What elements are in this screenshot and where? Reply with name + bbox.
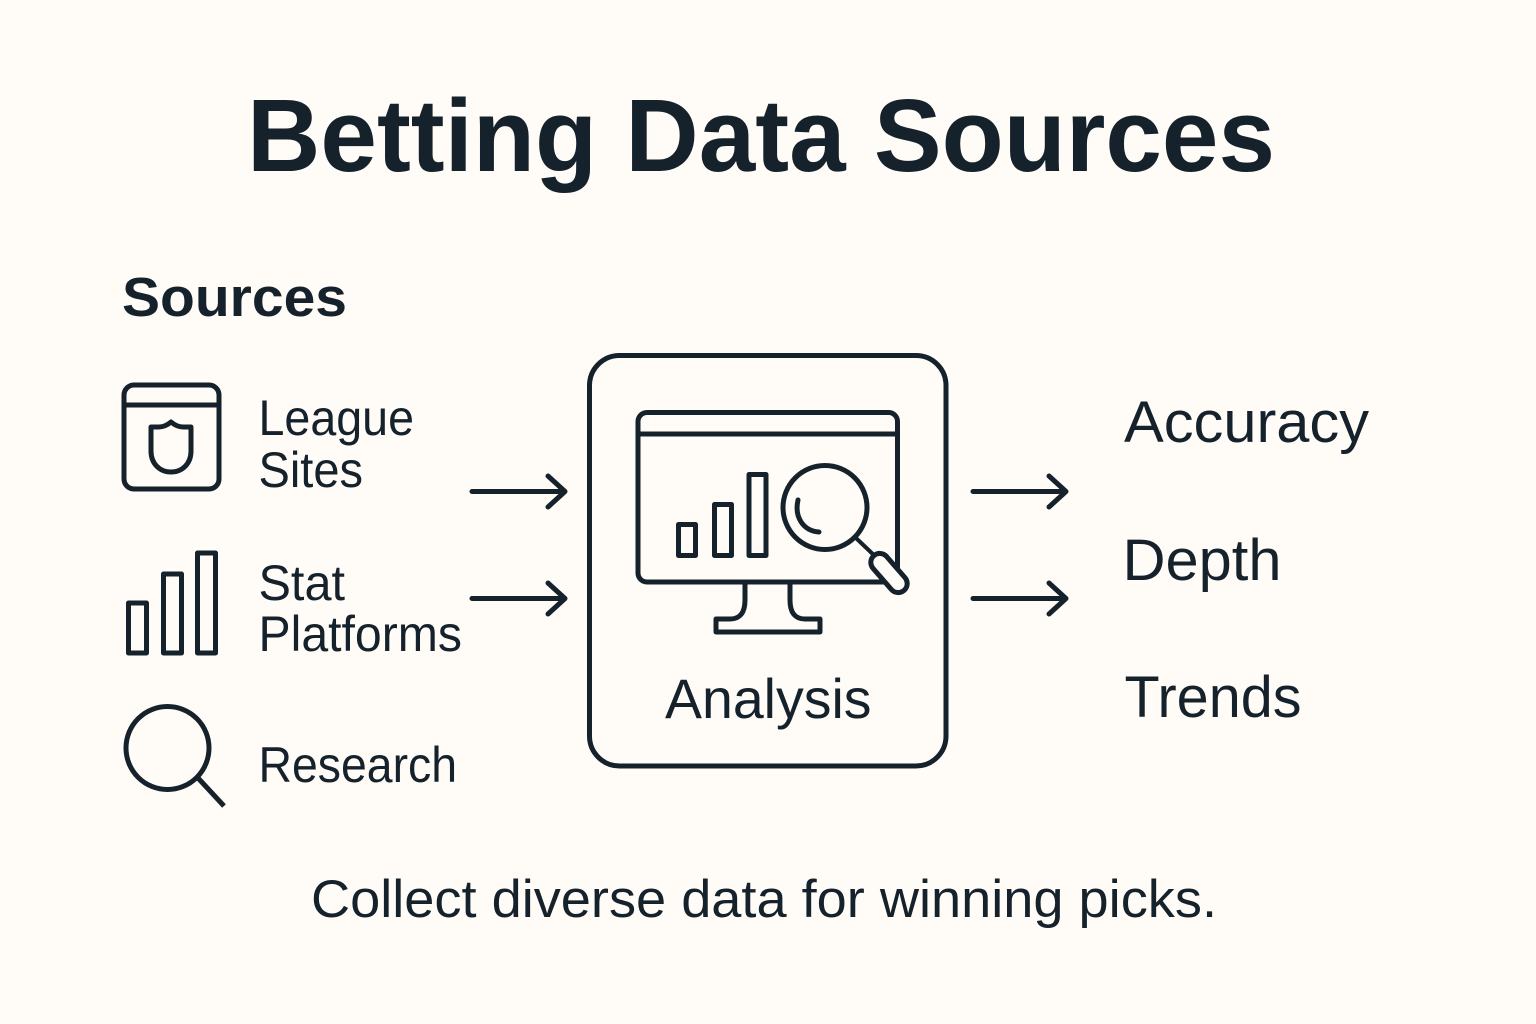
- label: trends: Trends: [1124, 665, 1302, 730]
- arrow: analysis to accuracy: [973, 476, 1066, 507]
- label: league sites: Sites: [258, 442, 363, 498]
- arrow: stat platforms to analysis: [472, 583, 565, 614]
- label: analysis: Analysis: [665, 667, 872, 730]
- label: research: Research: [258, 737, 457, 793]
- icon: research magnifier: [126, 706, 224, 806]
- title: Betting Data Sources: [247, 78, 1275, 193]
- label: depth: Depth: [1122, 528, 1282, 593]
- label: league sites: [258, 390, 414, 498]
- icon: monitor with chart and magnifier: [638, 412, 911, 632]
- icon: league site with shield: [124, 385, 219, 489]
- panel: analysis: [590, 356, 946, 766]
- arrow: analysis to depth: [973, 583, 1066, 614]
- heading: sources: Sources: [122, 266, 347, 328]
- arrow: league sites to analysis: [472, 476, 565, 507]
- label: stat platforms: Platforms: [258, 606, 462, 662]
- label: league sites: League: [258, 390, 414, 446]
- icon: stat bars: [128, 553, 216, 653]
- footer caption: Collect diverse data for winning picks.: [311, 870, 1217, 929]
- label: accuracy: Accuracy: [1124, 390, 1369, 455]
- label: stat platforms: [258, 555, 462, 662]
- label: stat platforms: Stat: [258, 555, 345, 611]
